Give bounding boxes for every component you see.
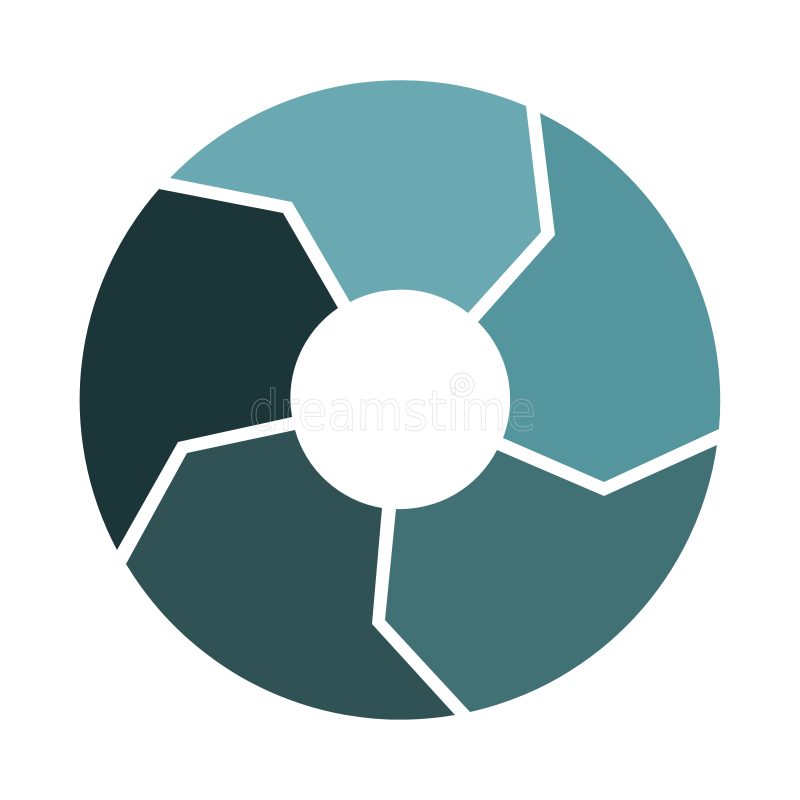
segment: left darkest teal arrow xyxy=(80,189,338,550)
watermark xyxy=(249,373,536,443)
segment: lower left dark teal arrow xyxy=(126,430,455,720)
watermark spiral logo xyxy=(450,373,474,397)
segment: right teal arrow xyxy=(478,113,720,482)
segment: lower right slate teal arrow xyxy=(385,445,717,712)
segment: top light teal arrow xyxy=(170,80,541,313)
watermark text: dreamstime xyxy=(249,379,536,443)
